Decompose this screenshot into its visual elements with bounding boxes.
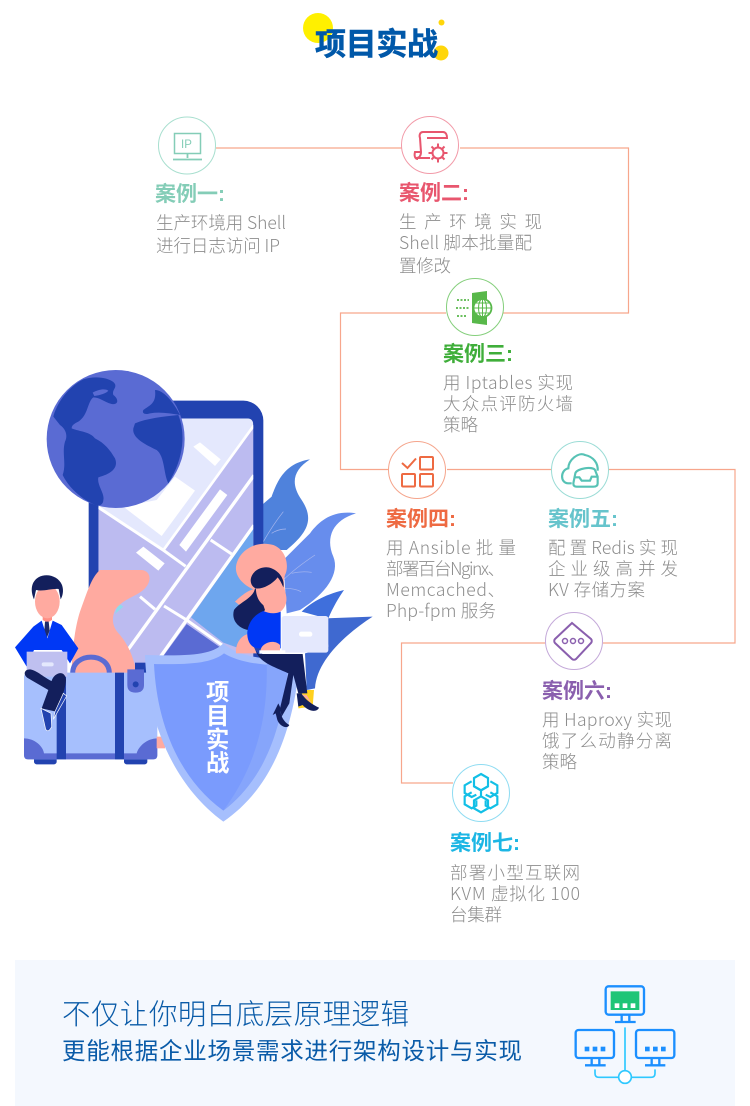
case 1: 生产环境用 Shell xyxy=(156,210,286,235)
shield: 实 xyxy=(206,726,229,752)
man with laptop xyxy=(15,575,78,731)
suitcase xyxy=(24,657,165,764)
shield: 项 xyxy=(206,679,229,705)
case 4: Php-fpm 服务 xyxy=(386,598,496,623)
icon: firewall globe xyxy=(446,278,504,336)
case 6: 饿了么动静分离 xyxy=(542,728,672,753)
case 3: 策略 xyxy=(443,412,478,437)
case 7 xyxy=(450,764,580,927)
case 6 xyxy=(542,612,672,774)
leaves xyxy=(260,459,373,708)
icon: computer network xyxy=(576,986,674,1083)
case 7: 部署小型互联网 xyxy=(450,860,580,885)
case 3: 大众点评防火墙 xyxy=(443,391,573,416)
case 4: 用 Ansible 批 量 xyxy=(386,535,516,560)
phone xyxy=(89,401,263,668)
case 3 xyxy=(443,278,573,437)
title xyxy=(303,13,448,62)
case 2: 生 产 环 境 实 现 xyxy=(399,209,542,234)
connector line between cases xyxy=(216,148,735,783)
title: 项目实战 xyxy=(315,27,438,62)
icon: IP monitor: IP xyxy=(181,139,192,151)
icon: checklist grid xyxy=(388,442,446,498)
case 4: 部署百台Nginx、 xyxy=(386,556,505,581)
case 2 xyxy=(399,116,542,278)
shield xyxy=(145,643,300,822)
case 5: 案例五: xyxy=(548,508,618,531)
shield: 目 xyxy=(206,703,229,729)
case 2: 置修改 xyxy=(399,253,451,278)
panel heading: 不仅让你明白底层原理逻辑 xyxy=(62,999,409,1031)
case 4: Memcached、 xyxy=(386,577,505,602)
case 1 xyxy=(155,117,286,258)
case 3: 用 Iptables 实现 xyxy=(443,370,573,395)
globe xyxy=(47,370,185,508)
case 4 xyxy=(386,442,516,623)
case 6: 案例六: xyxy=(542,680,612,703)
case 5: 配 置 Redis 实 现 xyxy=(548,535,678,560)
case 1: 进行日志访问 IP xyxy=(156,233,280,258)
case 7: KVM 虚拟化 100 xyxy=(450,881,580,906)
case 5: KV 存储方案 xyxy=(548,577,645,602)
case 7: 案例七: xyxy=(450,832,520,855)
icon: cloud storage xyxy=(552,442,608,498)
icon: hexagon cluster xyxy=(452,764,510,822)
case 5: 企 业 级 高 并 发 xyxy=(548,556,678,581)
woman with laptop xyxy=(233,544,328,727)
case 4: 案例四: xyxy=(386,508,456,531)
bottom panel xyxy=(15,960,735,1106)
case 1: 案例一: xyxy=(155,183,225,206)
illustration: phone, globe, people and shield xyxy=(15,370,373,822)
icon: routing diamond xyxy=(546,612,602,670)
case 3: 案例三: xyxy=(443,343,513,366)
shield: 战 xyxy=(206,750,229,776)
icon: script and gear xyxy=(402,116,458,174)
case 5 xyxy=(548,442,678,602)
panel subheading: 更能根据企业场景需求进行架构设计与实现 xyxy=(62,1038,522,1064)
case 2: 案例二: xyxy=(399,182,469,205)
case 6: 用 Haproxy 实现 xyxy=(542,707,672,732)
hand xyxy=(72,570,150,673)
case 2: Shell 脚本批量配 xyxy=(399,230,532,255)
case 6: 策略 xyxy=(542,749,578,774)
case 7: 台集群 xyxy=(450,902,502,927)
icon: IP monitor xyxy=(158,117,216,174)
